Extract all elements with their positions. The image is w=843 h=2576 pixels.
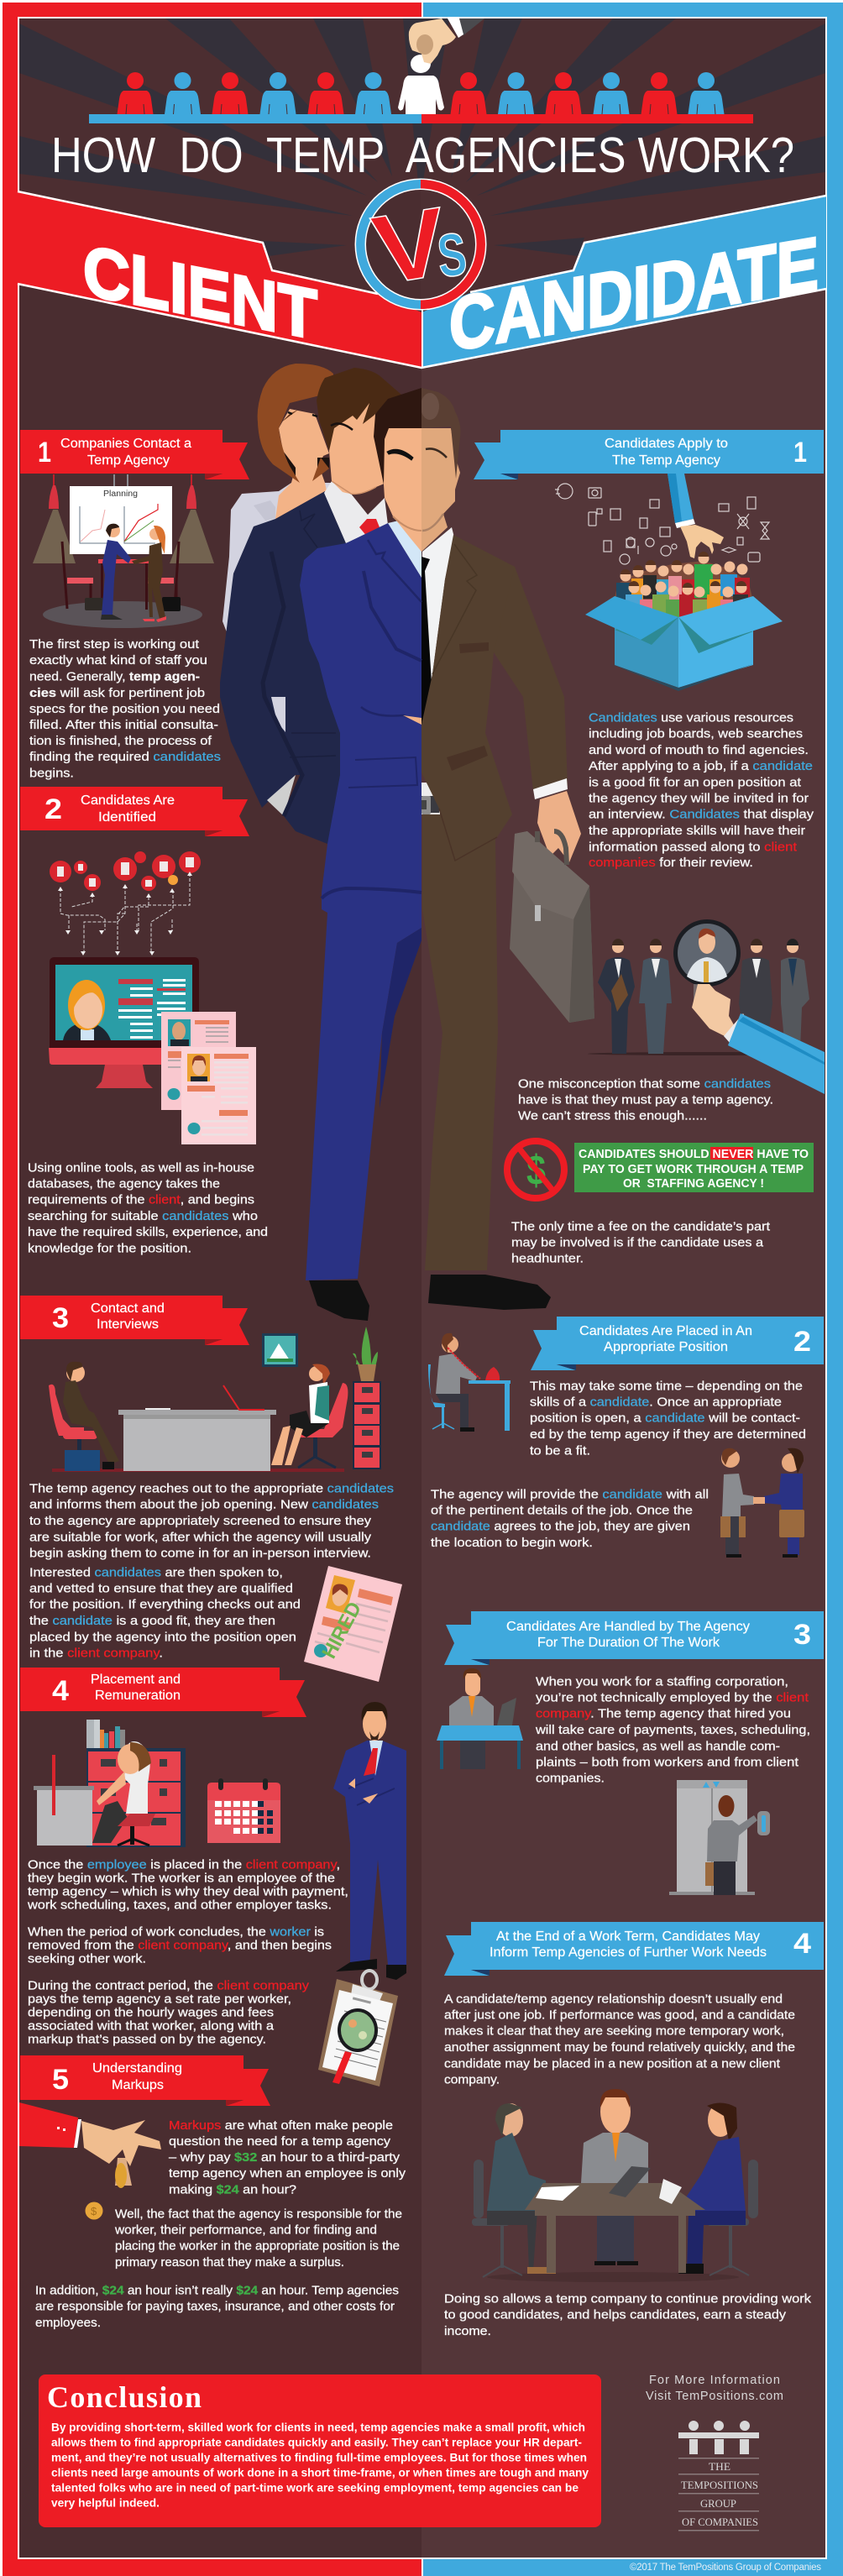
- left text: step 1: tion is finished, the process of: [29, 734, 212, 748]
- woman: [223, 364, 333, 781]
- right text: step 4: makes it clear that they are seeking more temporary work,: [444, 2024, 784, 2039]
- icon: hand picking figure: [409, 18, 484, 64]
- icon circles and dashed arrows: [50, 851, 201, 956]
- ribbon: candidate 3: For The Duration Of The Work: [537, 1636, 720, 1650]
- left text: step 3: Interested candidates are then spoken to,: [29, 1566, 283, 1580]
- left text: step 5: – why pay $32 an hour to a third-party: [169, 2150, 401, 2165]
- ribbon: client 1: Companies Contact a: [60, 437, 191, 451]
- illustration: candidates under magnifier: [588, 919, 825, 1094]
- more information link: [646, 2374, 783, 2403]
- right text: step 3: [535, 1674, 810, 1786]
- left text: step 1: specs for the position you need: [29, 702, 220, 716]
- left text: step 5: [35, 2118, 406, 2330]
- right text: step 1: is a good fit for an open position at: [589, 775, 802, 789]
- centre man: [581, 2089, 648, 2265]
- right text: step 3: and other basics, as well as handle com-: [536, 1739, 780, 1753]
- illustration: handshake: [720, 1448, 804, 1558]
- right text: fee note: may be involved is if the candidate uses a: [511, 1235, 764, 1249]
- left text: step 5: worker, their performance, and for finding and: [114, 2223, 377, 2238]
- VS badge: V: [366, 186, 454, 306]
- left text: step 3: and vetted to ensure that they are qualified: [29, 1581, 293, 1595]
- conclusion body: allows them to find appropriate candidates quickly and easily. They can’t replace your HR depart-: [51, 2437, 582, 2449]
- right text: misconception: have is that they must pay a temp agency.: [518, 1092, 773, 1107]
- ribbon: candidate 4: Inform Temp Agencies of Further Work Needs: [490, 1945, 767, 1960]
- ribbon: candidate 3: [444, 1611, 824, 1665]
- right text: step 3: you’re not technically employed by the client: [536, 1690, 809, 1704]
- right text: step 4: candidate may be placed in a new position at a new client: [444, 2056, 781, 2071]
- left text: step 4: temp agency – which is why they deal with payment,: [28, 1884, 348, 1898]
- magnifier: [673, 919, 741, 987]
- illustration: candidate icons and monitor: [49, 851, 256, 1144]
- CLIENT label: CLIENT: [83, 230, 317, 354]
- conclusion body: [51, 2422, 589, 2510]
- screen lines: [118, 979, 186, 1039]
- table and chairs: [98, 559, 150, 563]
- briefcases: [85, 598, 103, 610]
- person on screen: [63, 1023, 111, 1040]
- illustration: man at elevator: [669, 1780, 770, 1895]
- left text: step 5: Well, the fact that the agency is responsible for the: [115, 2207, 402, 2221]
- left text: step 3: the candidate is a good fit, they are then: [29, 1614, 275, 1628]
- illustration: man with crossed arms: [333, 1702, 406, 1980]
- right text: misconception: We can’t stress this enough......: [518, 1109, 707, 1123]
- ribbon: candidate 4: At the End of a Work Term, Candidates May: [496, 1929, 760, 1944]
- left text: step 5: are responsible for paying taxes, insurance, and other costs for: [35, 2300, 395, 2314]
- ribbon: candidate 4: 4: [793, 1928, 811, 1960]
- red and blue figures: [118, 72, 724, 114]
- right text: step 4: after just one job. If performance was good, and a candidate: [444, 2008, 795, 2023]
- floor: [52, 1469, 344, 1472]
- ribbon: client 2: Candidates Are: [81, 793, 175, 808]
- icon: no money: [507, 1141, 564, 1198]
- right text: step 3: When you work for a staffing corporation,: [536, 1674, 788, 1689]
- right text: step 1: an interview. Candidates that display: [589, 808, 814, 822]
- left text: step 4: removed from the client company , and then begins: [28, 1938, 332, 1952]
- ribbon: client 2: 2: [45, 793, 62, 825]
- lamps: [33, 474, 214, 563]
- ribbon: client 1: Temp Agency: [87, 453, 170, 468]
- right text: step 1: information passed along to client: [589, 840, 798, 854]
- monitor: [49, 957, 199, 1088]
- callout: never pay: PAY TO GET WORK THROUGH A TEMP: [583, 1162, 804, 1176]
- left text: step 4: seeking other work.: [28, 1951, 146, 1966]
- icon: gold coin: [86, 2202, 102, 2220]
- ribbon: candidate 2: Candidates Are Placed in An: [579, 1324, 752, 1338]
- right text: fee note: [511, 1219, 771, 1266]
- right text: step 1: Candidates use various resources: [589, 711, 793, 725]
- right text: step 4: company.: [444, 2073, 500, 2087]
- left text: step 4: work scheduling, taxes, and other employer tasks.: [27, 1898, 332, 1912]
- conclusion body: very helpful indeed.: [51, 2497, 160, 2510]
- right text: step 2: The agency will provide the candidate with all: [431, 1487, 709, 1501]
- right text: step 2: ed by the temp agency if they are determined: [530, 1427, 806, 1442]
- box: [585, 596, 783, 691]
- front man right half: [421, 388, 581, 1270]
- ribbon: client 4: [20, 1668, 306, 1717]
- left text: step 1: need. Generally, temp agen-: [29, 670, 200, 683]
- left text: step 3: for the position. If everything checks out and: [29, 1598, 301, 1612]
- conclusion body: By providing short-term, skilled work for clients in need, temp agencies make a small profit, which: [51, 2422, 585, 2434]
- right text: misconception: [518, 1076, 773, 1123]
- left text: step 3: to the agency are appropriately screened to ensure they: [29, 1514, 372, 1528]
- right chair and woman: [271, 1364, 348, 1468]
- table: [525, 2166, 705, 2273]
- left text: step 5: temp agency when an employee is only: [169, 2166, 406, 2181]
- left text: step 4: pays the temp agency a set rate per worker,: [28, 1992, 291, 2006]
- left text: step 1: cies will ask for pertinent job: [29, 686, 205, 700]
- white chosen figure: [398, 55, 444, 114]
- left text: step 3: in the client company .: [29, 1647, 163, 1661]
- ribbon: client 4: 4: [52, 1675, 69, 1707]
- icon: calendar: [207, 1778, 280, 1843]
- right text: step 4: A candidate/temp agency relationship doesn’t usually end: [444, 1992, 783, 2006]
- ribbon: client 5: Understanding: [92, 2061, 182, 2076]
- left text: step 2: requirements of the client, and begins: [28, 1193, 254, 1207]
- right text: step 1: including job boards, web searches: [589, 727, 803, 741]
- bar: [89, 114, 753, 123]
- ribbon: candidate 4: [444, 1922, 824, 1976]
- illustration: meeting at table: [472, 2089, 758, 2282]
- left text: step 1: begins.: [29, 766, 74, 781]
- right text: step 1: and word of mouth to find agencies.: [589, 743, 809, 757]
- ribbon: client 4: Placement and: [91, 1673, 181, 1687]
- ribbon: candidate 1: Candidates Apply to: [605, 437, 728, 451]
- left text: step 3: begin asking them to come in for an in-person interview.: [29, 1546, 371, 1560]
- right text: step 1: companies for their review.: [589, 856, 753, 870]
- right text: closing: Doing so allows a temp company to continue providing work: [444, 2292, 812, 2306]
- right text: fee note: headhunter.: [511, 1252, 584, 1266]
- picture: [262, 1333, 298, 1367]
- logo: TemPositions group: TEMPOSITIONS: [681, 2479, 758, 2491]
- left text: step 5: primary reason that they make a surplus.: [115, 2255, 344, 2270]
- conclusion body: ment, and they’re not usually alternatives to finding full-time employees. But for those times when: [51, 2452, 587, 2464]
- left text: step 5: employees.: [35, 2316, 101, 2330]
- right text: step 4: [444, 1992, 795, 2087]
- right text: fee note: The only time a fee on the candidate’s part: [511, 1219, 771, 1233]
- left text: step 3: and informs them about the job opening. New candidates: [29, 1498, 379, 1512]
- left text: step 2: have the required skills, experience, and: [28, 1225, 268, 1239]
- right text: step 2: of the pertinent details of the job. Once the: [431, 1503, 693, 1517]
- ribbon: client 3: Contact and: [91, 1301, 165, 1316]
- right text: step 1: After applying to a job, if a candidate: [589, 759, 813, 773]
- ribbon: client 5: [20, 2055, 270, 2106]
- VS badge: [354, 178, 487, 311]
- ribbon: client 5: Markups: [112, 2078, 164, 2092]
- left text: step 4: Once the employee is placed in the client company ,: [28, 1857, 340, 1872]
- callout: never pay: [574, 1143, 814, 1192]
- left text: step 3: are suitable for work, after which the agency will usually: [29, 1530, 372, 1544]
- ribbon: client 1: 1: [38, 437, 51, 469]
- left text: step 3: [29, 1482, 394, 1661]
- right text: closing: [444, 2292, 812, 2338]
- left text: step 1: [29, 637, 221, 781]
- left text: step 1: filled. After this initial consulta-: [29, 718, 218, 732]
- ribbon: candidate 3: 3: [793, 1619, 811, 1651]
- left text: step 3: The temp agency reaches out to the appropriate candidates: [29, 1482, 394, 1496]
- left text: step 1: The first step is working out: [29, 637, 200, 652]
- left text: step 4: markup that’s passed on by the agency.: [28, 2032, 266, 2046]
- left text: step 4: associated with that worker, along with a: [28, 2018, 275, 2033]
- central figures: woman, man, front man: [220, 364, 594, 1321]
- CV page front: [181, 1047, 256, 1144]
- right text: step 2: [431, 1379, 806, 1550]
- logo: TemPositions group: GROUP: [700, 2497, 736, 2510]
- more information link: Visit TemPositions.com: [646, 2390, 783, 2403]
- left chair and man: [49, 1362, 119, 1471]
- icon: gold coin: $: [91, 2205, 97, 2217]
- front man left half: [300, 388, 422, 1280]
- icon: no money: $: [526, 1147, 546, 1194]
- laptop: [223, 1385, 264, 1410]
- left text: step 5: placing the worker in the appropriate position is the: [115, 2239, 400, 2254]
- left text: step 4: depending on the hourly wages and fees: [28, 2005, 274, 2019]
- callout: never pay: CANDIDATES SHOULD NEVER HAVE TO: [579, 1147, 809, 1161]
- left text: step 3: placed by the agency into the position open: [29, 1630, 296, 1644]
- illustration: interview: [49, 1327, 381, 1472]
- ribbon: client 3: Interviews: [97, 1317, 159, 1332]
- conclusion body: clients need large amounts of work done in a short time-frame, or when times are tough and many: [51, 2467, 589, 2479]
- illustration: hired resume: HIRED: [317, 1599, 366, 1662]
- left text: step 1: finding the required candidates: [29, 750, 221, 764]
- heading: Conclusion: [47, 2380, 202, 2414]
- copyright: ©2017 The TemPositions Group of Companies: [630, 2563, 821, 2573]
- ribbon: client 3: [20, 1296, 249, 1345]
- header sunburst background: [19, 18, 825, 256]
- left text: step 1: exactly what kind of staff you: [29, 653, 207, 668]
- left text: step 2: [28, 1160, 268, 1255]
- illustration: hand dropping coin: [19, 2102, 161, 2188]
- floating icons: [555, 484, 769, 564]
- callout: never pay: OR STAFFING AGENCY !: [623, 1176, 764, 1191]
- ribbon: candidate 1: [474, 430, 824, 479]
- right text: step 2: skills of a candidate . Once an appropriate: [530, 1395, 782, 1409]
- illustration: man on phone: [428, 1333, 511, 1432]
- left text: step 4: When the period of work concludes, the worker is: [28, 1924, 324, 1939]
- right text: step 1: the agency they will be invited in for: [589, 792, 809, 806]
- man: [101, 524, 131, 620]
- left text: step 5: In addition, $24 an hour isn’t really $24 an hour. Temp agencies: [35, 2283, 399, 2297]
- right text: step 2: This may take some time – depending on the: [530, 1379, 803, 1393]
- left man: [487, 2103, 556, 2274]
- chairs: [472, 2160, 758, 2268]
- ribbon: client 5: 5: [52, 2064, 69, 2096]
- crowd: [615, 552, 752, 620]
- cabinet: [353, 1381, 381, 1469]
- right text: step 1: [589, 711, 814, 870]
- briefcase: [510, 831, 594, 1023]
- panel: conclusion: [39, 2374, 601, 2527]
- left text: step 4: During the contract period, the client company: [28, 1978, 310, 1992]
- logo: TemPositions group: [678, 2421, 759, 2531]
- more information link: For More Information: [649, 2374, 780, 2387]
- right text: step 3: company . The temp agency that hired you: [536, 1707, 791, 1721]
- right text: step 3: companies.: [536, 1772, 605, 1786]
- ribbon: candidate 2: Appropriate Position: [604, 1340, 728, 1354]
- right text: step 3: will take care of payments, taxes, scheduling,: [535, 1723, 810, 1737]
- arm and hand: [668, 474, 694, 523]
- illustration: contract and magnifier: [318, 1971, 398, 2086]
- left text: step 5: making $24 an hour?: [169, 2182, 296, 2196]
- left text: step 2: searching for suitable candidates who: [28, 1209, 258, 1223]
- desk: [118, 1410, 276, 1415]
- illustration: planning meeting: Planning: [103, 490, 138, 499]
- right text: step 4: another assignment may be found relatively quickly, and the: [444, 2040, 795, 2055]
- left text: step 2: knowledge for the position.: [28, 1241, 191, 1255]
- woman: [132, 526, 166, 622]
- plant: [353, 1327, 378, 1369]
- right text: closing: income.: [444, 2324, 491, 2338]
- right text: step 3: plaints – both from workers and from client: [536, 1755, 799, 1769]
- illustration: planning meeting: [33, 474, 214, 628]
- right text: step 2: candidate agrees to the job, they are given: [431, 1520, 690, 1534]
- board: [70, 486, 172, 554]
- shoes: [309, 1275, 551, 1321]
- ribbon: candidate 1: 1: [793, 437, 807, 469]
- floor: [43, 601, 202, 628]
- illustration: hired resume: [304, 1566, 402, 1682]
- ribbon: candidate 2: 2: [793, 1326, 811, 1358]
- right text: closing: to good candidates, and helps candidates, earn a steady: [444, 2308, 787, 2322]
- left text: step 4: [27, 1857, 348, 2046]
- right text: step 2: position is open, a candidate will be contact-: [530, 1411, 800, 1426]
- red and blue chevron bands: [18, 191, 826, 368]
- left text: step 5: Markups are what often make people: [169, 2118, 393, 2133]
- ribbon: client 4: Remuneration: [95, 1689, 181, 1703]
- right man: [678, 2102, 746, 2274]
- people row: [89, 55, 753, 123]
- illustration: office worker at filing cabinet: [34, 1720, 186, 1847]
- left text: step 2: Using online tools, as well as in-house: [28, 1160, 254, 1175]
- illustration: crowd in a box: [555, 474, 783, 691]
- ribbon: client 1: [20, 430, 249, 479]
- right text: step 2: to be a fit.: [530, 1443, 590, 1458]
- illustration: man at laptop: [437, 1668, 523, 1769]
- right text: misconception: One misconception that some candidates: [518, 1076, 771, 1091]
- CV page back: [161, 1012, 236, 1110]
- second man: [220, 368, 401, 844]
- ribbon: client 2: [20, 787, 249, 836]
- VS badge: S: [434, 221, 469, 291]
- ribbon: candidate 1: The Temp Agency: [612, 453, 720, 468]
- ribbon: client 3: 3: [52, 1302, 69, 1334]
- ribbon: candidate 3: Candidates Are Handled by The Agency: [506, 1620, 750, 1634]
- right text: step 2: the location to begin work.: [431, 1536, 593, 1550]
- left text: step 2: databases, the agency takes the: [28, 1176, 220, 1191]
- right text: step 1: the appropriate skills will have their: [589, 824, 805, 838]
- ribbon: client 2: Identified: [98, 810, 156, 825]
- logo: TemPositions group: OF COMPANIES: [682, 2516, 758, 2528]
- left text: step 5: question the need for a temp agency: [169, 2134, 391, 2149]
- conclusion body: talented folks who are in need of part-time work are seeking employment, temp agencies can be: [51, 2482, 579, 2495]
- logo: TemPositions group: THE: [709, 2460, 730, 2473]
- ribbon: candidate 2: [531, 1317, 824, 1370]
- left text: step 4: they begin work. The worker is an employee of the: [28, 1871, 335, 1885]
